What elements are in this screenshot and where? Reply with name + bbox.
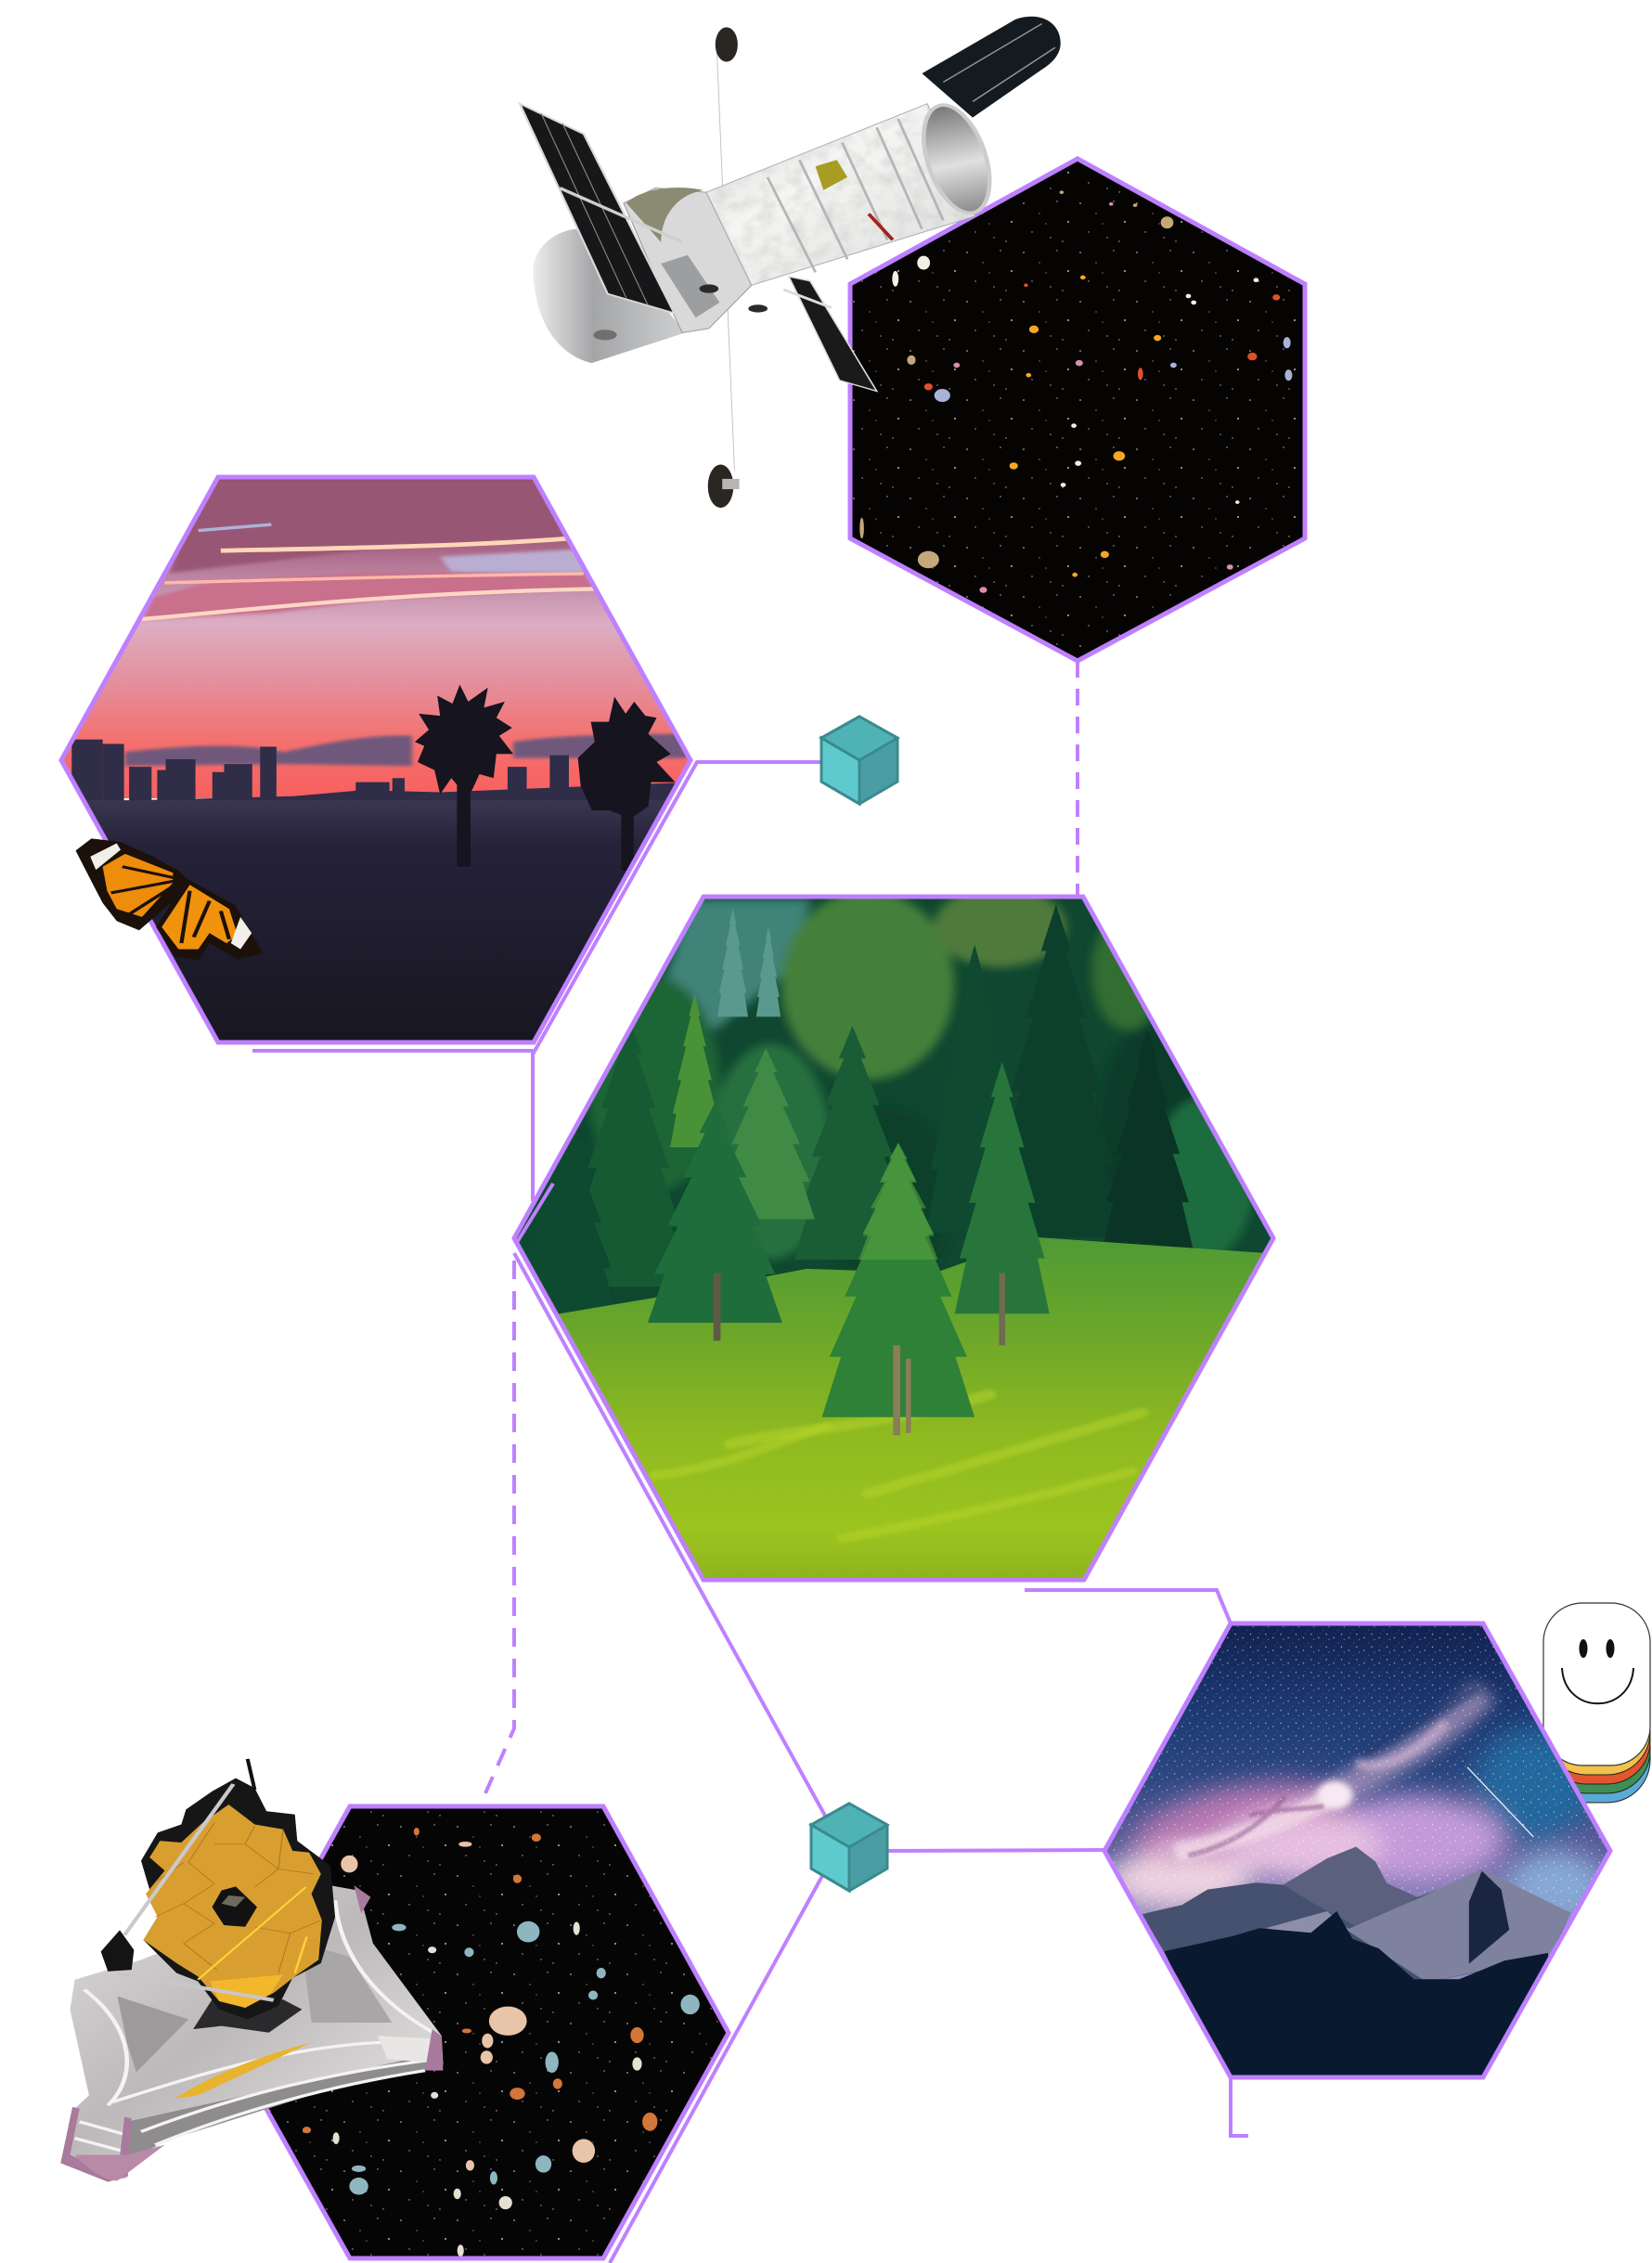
illustration: Hubble Space Telescope	[520, 17, 1061, 508]
soft canopy	[587, 899, 1255, 1262]
dark forest	[1164, 1911, 1556, 2081]
background spruces	[519, 904, 1194, 1313]
dashed connector: forest to JWST field	[485, 1261, 514, 1793]
sunset sky	[46, 476, 699, 798]
meadow	[559, 1237, 1262, 1578]
meadow highlights	[654, 1395, 1142, 1539]
panel: city sunset hexagon	[46, 476, 699, 1050]
connector: lower cube to JWST field	[610, 1876, 822, 2263]
horizon clouds	[125, 734, 693, 766]
aperture door	[922, 17, 1061, 118]
connector: mountain hexagon foot	[1231, 2077, 1248, 2136]
icon: upper teal cube	[821, 717, 897, 804]
dark land	[87, 800, 665, 1040]
front solar panel	[520, 104, 682, 314]
rear solar panel	[783, 277, 877, 391]
palm trees	[415, 685, 676, 871]
icon: lower teal cube	[811, 1804, 887, 1891]
skyline	[71, 739, 676, 800]
main tube	[706, 99, 1001, 285]
mirror frame	[141, 1778, 335, 2019]
panel: Hubble deep field hexagon	[845, 153, 1309, 668]
cloud streaks	[142, 480, 595, 619]
golden mirror	[144, 1804, 322, 2008]
dashed connector: deep field to forest	[1076, 661, 1079, 897]
foreground spruces	[648, 1062, 1050, 1435]
colored glows	[1104, 1728, 1605, 1920]
shooting star	[1467, 1767, 1533, 1837]
panel: Milky Way mountain hexagon	[1102, 1621, 1614, 2081]
instrument shadow	[193, 1999, 302, 2033]
icon: monarch butterfly	[76, 838, 263, 960]
Milky Way band	[1163, 1688, 1485, 1856]
connector: sunset to cube and forest	[252, 762, 821, 1201]
connector: forest to mountain hexagon	[1025, 1590, 1231, 1623]
sunshield	[60, 1885, 443, 2182]
connector: forest to lower cube	[514, 1253, 825, 1816]
panel: Webb deep field hexagon	[264, 1804, 731, 2261]
connector: lower cube to mountain hexagon	[886, 1850, 1104, 1851]
mountains	[1142, 1847, 1570, 1983]
night sky	[1106, 1626, 1607, 1979]
aft section	[533, 188, 768, 363]
secondary mirror boom and antenna	[101, 1759, 274, 2000]
antenna mast	[708, 27, 740, 508]
illustration: James Webb Space Telescope	[60, 1759, 443, 2182]
panel: forest meadow hexagon	[501, 886, 1285, 1602]
icon: stacked smiley card	[1543, 1603, 1650, 1803]
dark forest backdrop	[501, 891, 1285, 1323]
